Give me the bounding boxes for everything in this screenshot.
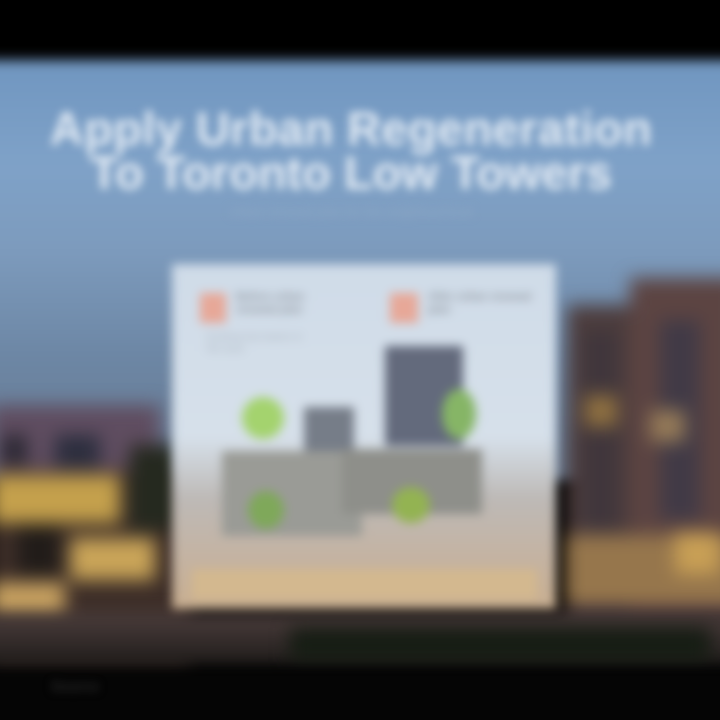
left column heading <box>194 287 305 330</box>
left low building <box>0 395 192 668</box>
right tower <box>556 265 720 620</box>
left heading text: Before urban renewal plan <box>236 291 304 316</box>
street foreground <box>0 612 720 668</box>
lower street glow <box>192 569 537 599</box>
title line 2: To Toronto Low Towers <box>90 146 612 199</box>
right heading text: After urban renewal plan <box>428 291 531 316</box>
footer logo text: Source <box>51 678 99 694</box>
left caption: Existing low towers in the area <box>207 332 303 355</box>
dark foliage strip <box>290 628 710 662</box>
title line 1: Apply Urban Regeneration <box>50 102 652 155</box>
title <box>47 102 655 219</box>
bottom black band <box>0 668 720 720</box>
right illustration <box>344 339 488 529</box>
left illustration <box>216 390 366 540</box>
central poster panel <box>164 258 564 616</box>
right icon <box>390 293 418 323</box>
subtitle: Urban renewal plan for the neighbourhood <box>229 204 473 219</box>
left icon <box>200 293 226 323</box>
sky background <box>0 60 720 480</box>
right column heading <box>384 287 533 329</box>
